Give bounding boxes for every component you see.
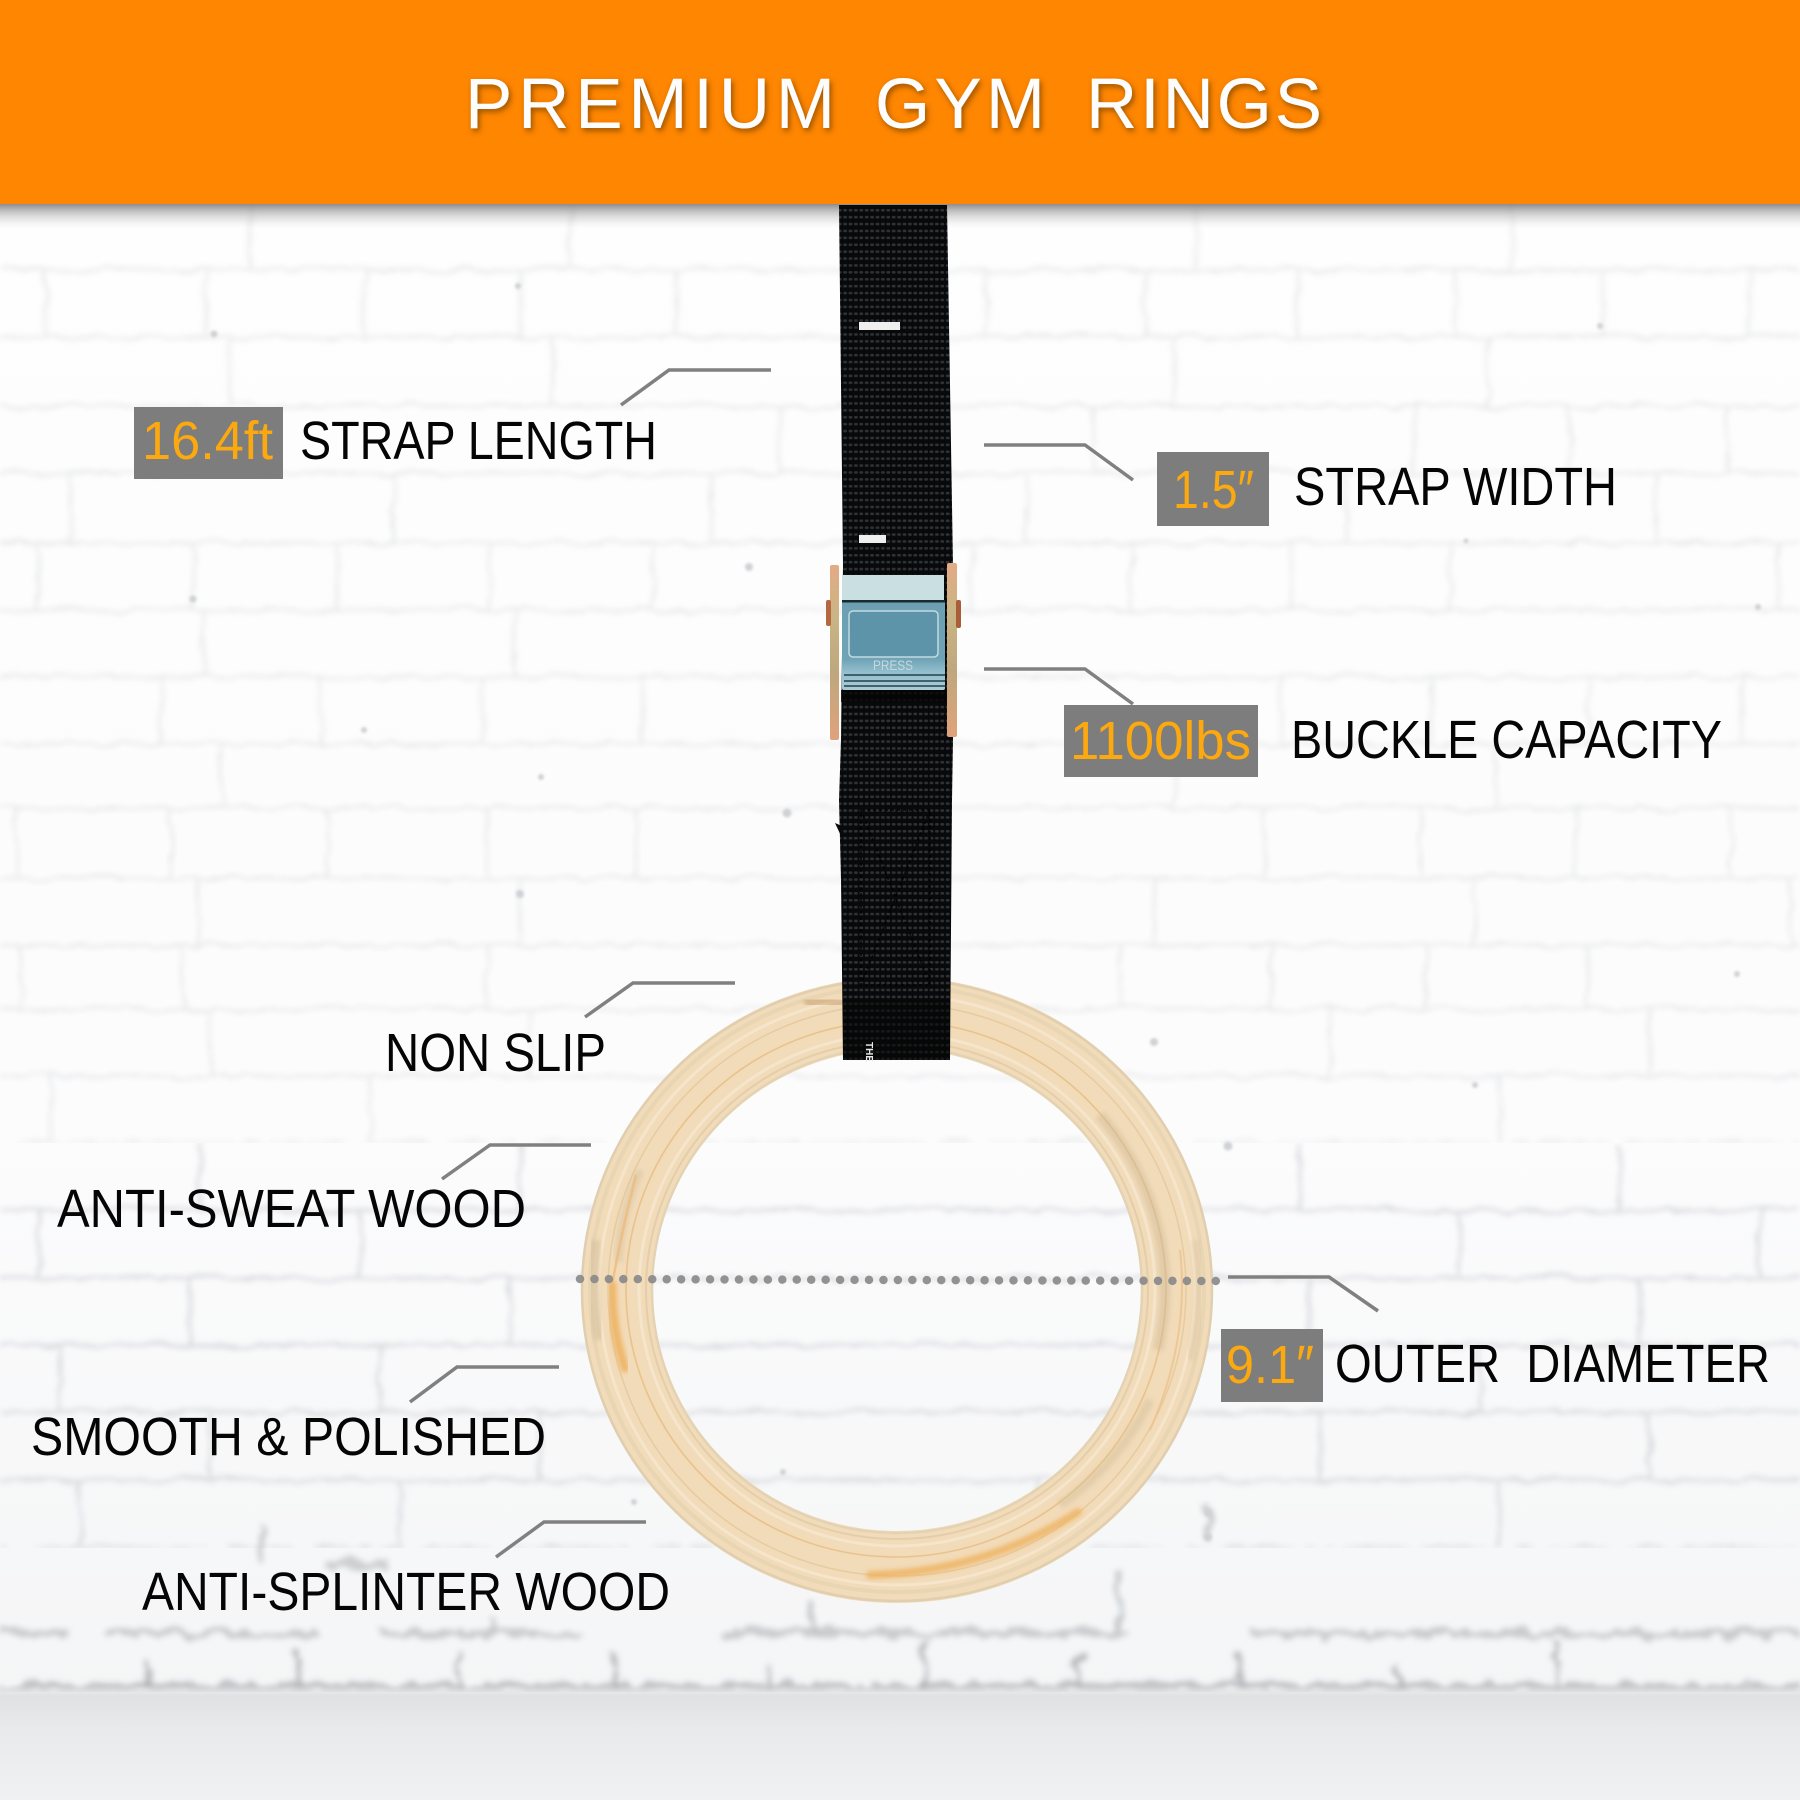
callout: anti-sweat wood: ANTI-SWEAT WOOD — [57, 1179, 526, 1239]
callout: anti-sweat wood — [57, 1145, 591, 1239]
callout: strap length: STRAP LENGTH — [300, 411, 657, 471]
title: RINGS — [1086, 65, 1322, 144]
callout: buckle capacity: BUCKLE CAPACITY — [1291, 710, 1722, 770]
callout: anti-splinter wood — [142, 1522, 670, 1622]
callout: buckle capacity — [984, 669, 1722, 777]
callout: anti-splinter wood: ANTI-SPLINTER WOOD — [142, 1562, 670, 1622]
callout: outer diameter — [1221, 1277, 1770, 1402]
callout: strap width: 1.5″ — [1173, 460, 1254, 520]
strap: black webbing: THE — [863, 1042, 874, 1062]
buckle: metal cam buckle — [826, 563, 961, 740]
callout: strap width — [984, 445, 1617, 526]
callout: non slip — [385, 983, 735, 1083]
callout: strap width: STRAP WIDTH — [1294, 457, 1617, 517]
callout: smooth and polished — [31, 1367, 559, 1467]
title: PREMIUM — [465, 65, 835, 144]
title: GYM — [875, 65, 1045, 144]
title — [465, 65, 1322, 144]
callout: outer diameter: 9.1″ — [1226, 1335, 1314, 1395]
callout: non slip: NON SLIP — [385, 1023, 606, 1083]
strap: black webbing — [835, 205, 953, 1062]
dotted diameter line — [580, 1279, 1216, 1281]
header banner shadow — [0, 204, 1800, 228]
buckle: metal cam buckle: PRESS — [873, 657, 913, 673]
callout: smooth and polished: SMOOTH & POLISHED — [31, 1407, 546, 1467]
callout: buckle capacity: 1100lbs — [1070, 711, 1251, 771]
header banner — [0, 0, 1800, 204]
callout: strap length: 16.4ft — [142, 411, 273, 471]
callout: strap length — [134, 370, 771, 479]
gym ring: wooden ring — [582, 979, 1212, 1601]
